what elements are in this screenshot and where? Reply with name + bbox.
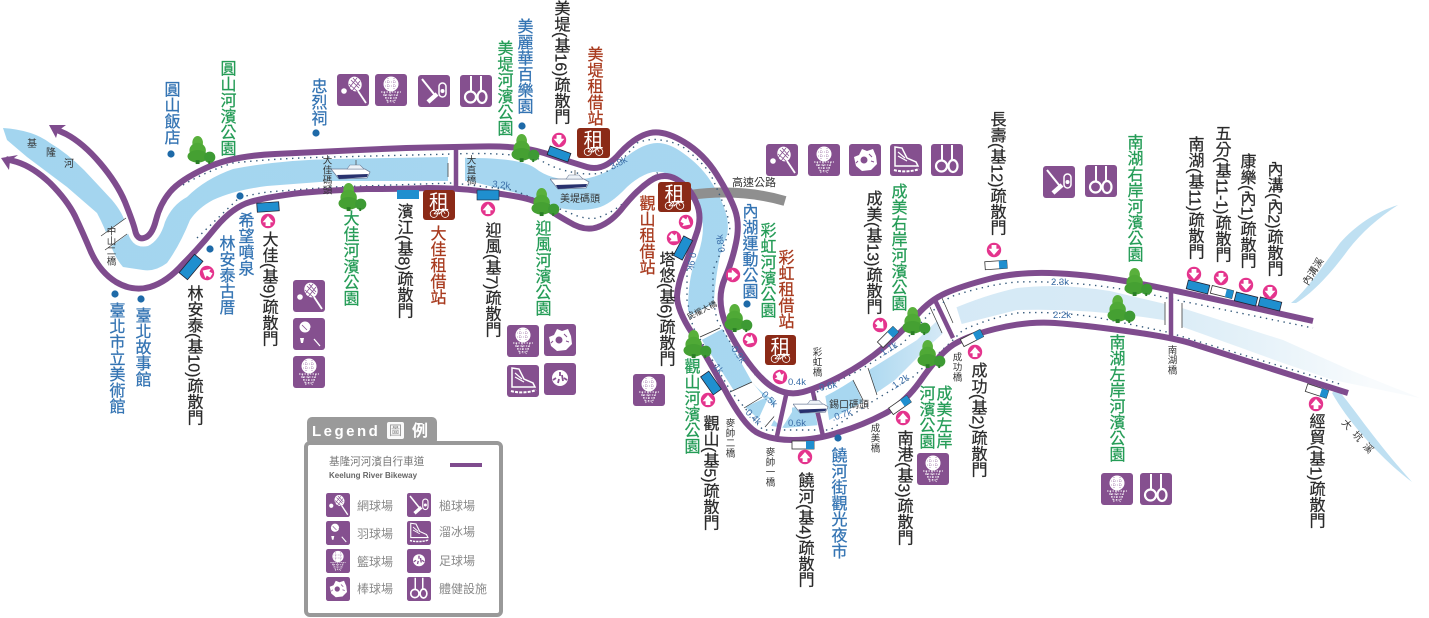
stream: 大坑溪 [1332,389,1412,482]
road label: 高速公路: 高速公路 [732,175,776,189]
river name: 基隆河 [27,137,74,170]
bridge label: 成功橋: 成功橋 [950,351,962,383]
gate: 林安泰 [179,254,217,283]
distance markers: 3.8k [608,154,629,173]
distance markers: 0.5k [759,389,780,410]
distance markers: 0.9k [729,344,748,366]
bikeway: south bank [6,159,1348,440]
distance markers: 2.2k [1053,310,1071,321]
label: 臺北故事館: 臺北故事館 [132,307,152,387]
label: 美堤租借站: 美堤租借站 [584,46,604,126]
legend tab: Legend [312,423,380,440]
legend item: 羽球場: 羽球場 [357,527,393,541]
facility icons: 成美右岸 [766,144,963,176]
highway: 高速公路 [690,193,785,201]
bridge label: 中山二橋: 中山二橋 [104,225,116,267]
label: 五分(基11-1)疏散門: 五分(基11-1)疏散門 [1212,125,1232,264]
label: 成功(基2)疏散門: 成功(基2)疏散門 [968,362,988,479]
distance markers: 1k [711,362,726,377]
legend item: 體健設施: 體健設施 [439,581,487,596]
legend line [450,463,482,467]
gate: 經貿 [1305,384,1329,411]
label: 美麗華百樂園: 美麗華百樂園 [514,18,534,114]
distance markers [492,154,1071,429]
label: 迎風河濱公園: 迎風河濱公園 [532,220,552,316]
bridge label: 彩虹橋: 彩虹橋 [810,347,822,378]
gate: 濱江 [397,190,419,199]
label: 觀山(基5)疏散門: 觀山(基5)疏散門 [700,415,720,532]
label: 南湖(基11)疏散門: 南湖(基11)疏散門 [1186,136,1204,260]
label: 圓山河濱公園: 圓山河濱公園 [218,60,236,156]
gate: 成功 [960,329,984,359]
river name: 基隆河: 基 [27,137,37,150]
label: 南湖左岸河濱公園: 南湖左岸河濱公園 [1106,334,1126,462]
facility icon: 觀山 [633,374,665,406]
facility icon: 成美左岸 [917,453,949,485]
tree: 大佳河濱公園 [338,183,366,211]
label: 饒河街觀光夜市: 饒河街觀光夜市 [828,447,848,559]
legend tab: 例 [412,422,428,440]
distance markers: 3.2k [492,179,511,192]
legend item: 籃球場: 籃球場 [357,554,393,569]
stream label: 大坑溪: 大坑溪 [1339,416,1381,461]
label: 迎風(基7)疏散門: 迎風(基7)疏散門 [482,222,502,339]
label: 成美(基13)疏散門: 成美(基13)疏散門 [864,190,882,316]
gate: 南港 [889,395,911,425]
bridge label: 麥帥二橋: 麥帥二橋 [724,417,735,459]
legend tab: 圖 [389,423,402,438]
legend item: 體健設施 [407,577,487,601]
facility icons: 迎風 [507,324,576,397]
gate: 彩虹 [726,268,790,387]
tree: 彩虹河濱公園 [724,304,752,332]
boat: 錫口碼頭 [793,396,828,413]
arrowhead: south bank [1,155,18,170]
distance markers: .0.7k [831,407,854,424]
tree: 圓山河濱公園 [187,136,215,164]
rental sign: 彩虹 [765,335,796,365]
label: 經貿(基1)疏散門: 經貿(基1)疏散門 [1306,413,1326,530]
tree: 成美左岸河濱公園 [917,340,945,368]
facility icons: 大佳上方 [337,74,492,107]
bikeway: north bank [55,129,1313,393]
label: 林安泰古厝: 林安泰古厝 [216,235,236,315]
dotted path: north bank [183,139,1313,392]
legend item: 溜冰場 [407,521,475,545]
boat: 美堤碼頭 [550,170,589,189]
label: 大佳(基9)疏散門: 大佳(基9)疏散門 [260,231,278,348]
bridge label: 南湖橋: 南湖橋 [1166,344,1177,376]
legend item: 足球場: 足球場 [439,554,475,568]
rental sign: 觀山: 租 [664,183,684,206]
rental sign: 美堤 [577,128,610,158]
dotted path: south bank [197,173,1343,430]
label: 美堤河濱公園: 美堤河濱公園 [494,40,514,136]
rental sign: 大佳 [423,190,455,220]
gate: 五分 [1210,271,1234,299]
distance markers: 0.4k [743,407,764,428]
river name: 基隆河: 隆 [46,146,56,159]
tree: 南湖左岸河濱公園 [1107,295,1135,323]
legend [306,417,501,615]
distance markers: 0.6k [788,418,806,429]
river name: 基隆河: 河 [64,158,74,170]
label: 塔悠(基6)疏散門: 塔悠(基6)疏散門 [656,251,676,368]
rental sign: 彩虹: 租 [770,336,790,359]
river: 基隆河 [3,128,1420,428]
label: 南港(基3)疏散門: 南港(基3)疏散門 [894,430,914,547]
distance markers: 0.6k [818,379,838,394]
label: 林安泰(基10)疏散門: 林安泰(基10)疏散門 [184,285,204,427]
legend item: 籃球場 [326,549,393,573]
legend item: 網球場 [326,493,393,517]
label: 希望噴泉: 希望噴泉 [236,212,254,276]
rental sign: 觀山 [658,182,691,212]
gate: 大佳 [257,202,279,228]
pier label: 錫口碼頭: 錫口碼頭 [829,398,869,411]
label: 長壽(基12)疏散門: 長壽(基12)疏散門 [988,111,1006,237]
label: 彩虹河濱公園: 彩虹河濱公園 [758,222,776,318]
distance markers: 0.9k [684,251,698,271]
rental sign: 美堤: 租 [584,129,604,152]
label: 成美左岸: 成美左岸 [934,385,952,449]
label: 觀山租借站: 觀山租借站 [636,195,656,275]
label: 康樂(內1)疏散門: 康樂(內1)疏散門 [1238,153,1256,270]
distance markers: 0.4k [788,377,806,388]
label: 成美右岸河濱公園: 成美右岸河濱公園 [888,183,908,311]
distance markers: 2.3k [1051,277,1069,288]
legend item: 棒球場: 棒球場 [357,582,393,596]
legend item: 足球場 [407,549,475,573]
location dots [111,122,842,442]
gate: 長壽 [985,243,1007,270]
label: 臺北市立美術館: 臺北市立美術館 [106,302,126,414]
pier label: 美堤碼頭: 美堤碼頭 [560,192,600,205]
label: 彩虹租借站: 彩虹租借站 [776,249,794,329]
bridge label: 民權大橋: 民權大橋 [685,298,718,322]
tree: 美堤河濱公園 [511,134,539,162]
stream label: 內溝溪: 內溝溪 [1300,255,1326,288]
legend item: 網球場: 網球場 [357,499,393,513]
legend item: 羽球場 [326,521,393,545]
boat: 大佳碼頭 [331,160,370,179]
facility icons: 大佳下方 [293,280,325,388]
distance markers: 0.8k [715,234,728,253]
tree: 觀山河濱公園 [683,330,711,358]
label: 內湖運動公園: 內湖運動公園 [740,203,758,299]
legend item: 棒球場 [326,577,393,601]
bridge label: 大直橋: 大直橋 [464,154,476,186]
gate: 成美 [870,315,899,348]
legend tab [307,417,437,445]
gate: 美堤 [547,133,571,162]
distance markers: 1.2k [890,372,912,391]
distance markers: 1.1k [879,340,900,359]
label: 大佳河濱公園: 大佳河濱公園 [340,210,360,306]
stream: 內溝溪 [1291,205,1398,303]
bridge label: 麥帥一橋: 麥帥一橋 [764,446,775,488]
legend title [329,455,425,480]
label: 大佳租借站: 大佳租借站 [428,225,446,305]
legend item: 溜冰場: 溜冰場 [439,524,475,539]
bridge gaps [100,152,1182,428]
rental sign: 大佳: 租 [429,191,449,214]
label: 濱江(基8)疏散門: 濱江(基8)疏散門 [394,203,414,320]
gate: 康樂 [1234,278,1258,306]
facility icons: 南湖左岸 [1101,473,1172,505]
tree: 迎風河濱公園 [531,188,559,216]
label: 忠烈祠: 忠烈祠 [308,78,328,126]
legend box [306,443,501,615]
legend item: 槌球場 [407,493,475,517]
gate: 饒河 [792,441,814,464]
gate: 內溝 [1258,285,1282,311]
label: 南湖右岸河濱公園: 南湖右岸河濱公園 [1124,134,1144,262]
facility icons: 南湖右岸 [1043,165,1117,198]
tree: 南湖右岸河濱公園 [1124,268,1152,296]
gate: 塔悠 [664,212,696,260]
legend item: 槌球場: 槌球場 [439,498,475,513]
gate: 迎風 [477,190,499,216]
label: 河濱公園: 河濱公園 [916,385,936,449]
label: 內溝(內2)疏散門: 內溝(內2)疏散門 [1264,161,1284,278]
bridge decks [456,147,1171,436]
label: 美堤(基16)疏散門: 美堤(基16)疏散門 [552,0,570,126]
bridge label: 成美橋: 成美橋 [868,422,880,454]
label: 饒河(基4)疏散門: 饒河(基4)疏散門 [796,472,814,589]
legend title: Keelung River Bikeway [329,471,418,480]
tree: 成美右岸河濱公園 [902,307,930,335]
label: 觀山河濱公園: 觀山河濱公園 [682,358,700,454]
label: 圓山飯店: 圓山飯店 [162,81,180,145]
gate: 觀山 [701,371,721,407]
arrowhead: north bank [49,125,66,138]
legend title: 基隆河河濱自行車道 [329,455,425,468]
pier label: 大佳碼頭: 大佳碼頭 [320,154,332,196]
gate: 南湖 [1186,267,1210,294]
river highlight [170,202,212,262]
